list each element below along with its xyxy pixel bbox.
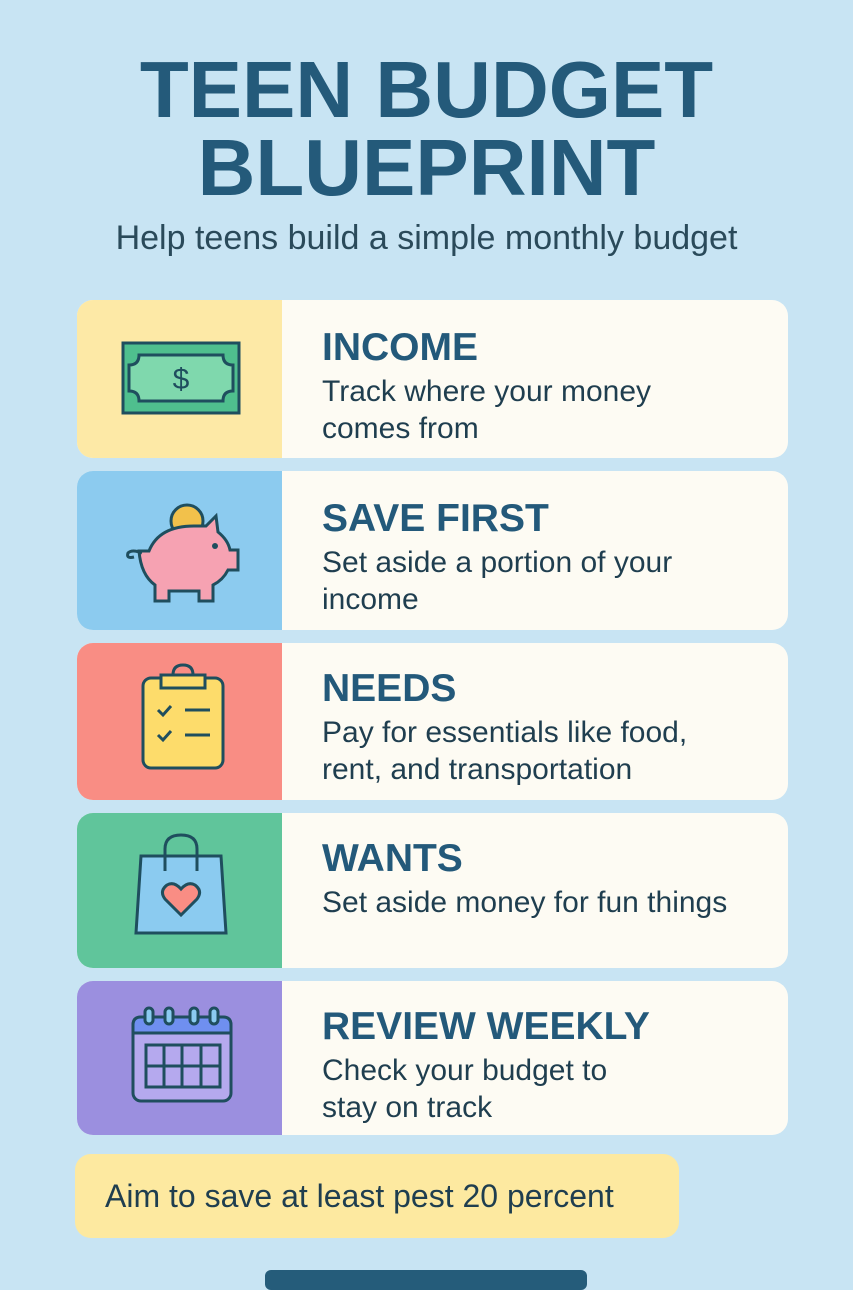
bottom bar — [265, 1270, 587, 1290]
panel: wants — [77, 813, 788, 968]
text: income: comes from — [322, 412, 479, 445]
subtitle: Help teens build a simple monthly budget — [116, 219, 737, 257]
text: save first — [322, 497, 672, 616]
text: income: INCOME — [322, 326, 478, 369]
icon: money bill — [77, 300, 282, 458]
text: needs: Pay for essentials like food, — [322, 716, 687, 749]
text: save first: SAVE FIRST — [322, 497, 549, 540]
text: review weekly: REVIEW WEEKLY — [322, 1005, 650, 1048]
text: wants — [322, 837, 727, 919]
text: wants: WANTS — [322, 837, 463, 880]
text: income — [322, 326, 651, 445]
callout — [75, 1154, 679, 1238]
text: wants: Set aside money for fun things — [322, 886, 727, 919]
icon: shopping bag with heart — [77, 813, 282, 968]
panel: income — [77, 300, 788, 458]
panel: needs — [77, 643, 788, 800]
panel: save first — [77, 471, 788, 630]
callout: Aim to save at least pest 20 percent — [105, 1178, 614, 1214]
icon: money bill: $ — [173, 363, 190, 396]
text: review weekly — [322, 1005, 650, 1124]
text: review weekly: stay on track — [322, 1091, 492, 1124]
icon: clipboard — [77, 643, 282, 800]
icon: piggy bank — [77, 471, 282, 630]
text: review weekly: Check your budget to — [322, 1054, 607, 1087]
text: income: Track where your money — [322, 375, 651, 408]
panel: review weekly — [77, 981, 788, 1135]
title: TEEN BUDGET — [140, 45, 713, 134]
title line 2: BLUEPRINT — [198, 123, 655, 212]
text: needs: rent, and transportation — [322, 753, 632, 786]
text: needs: NEEDS — [322, 667, 456, 710]
text: save first: Set aside a portion of your — [322, 546, 672, 579]
text: save first: income — [322, 583, 419, 616]
icon: calendar — [77, 981, 282, 1135]
text: needs — [322, 667, 687, 786]
